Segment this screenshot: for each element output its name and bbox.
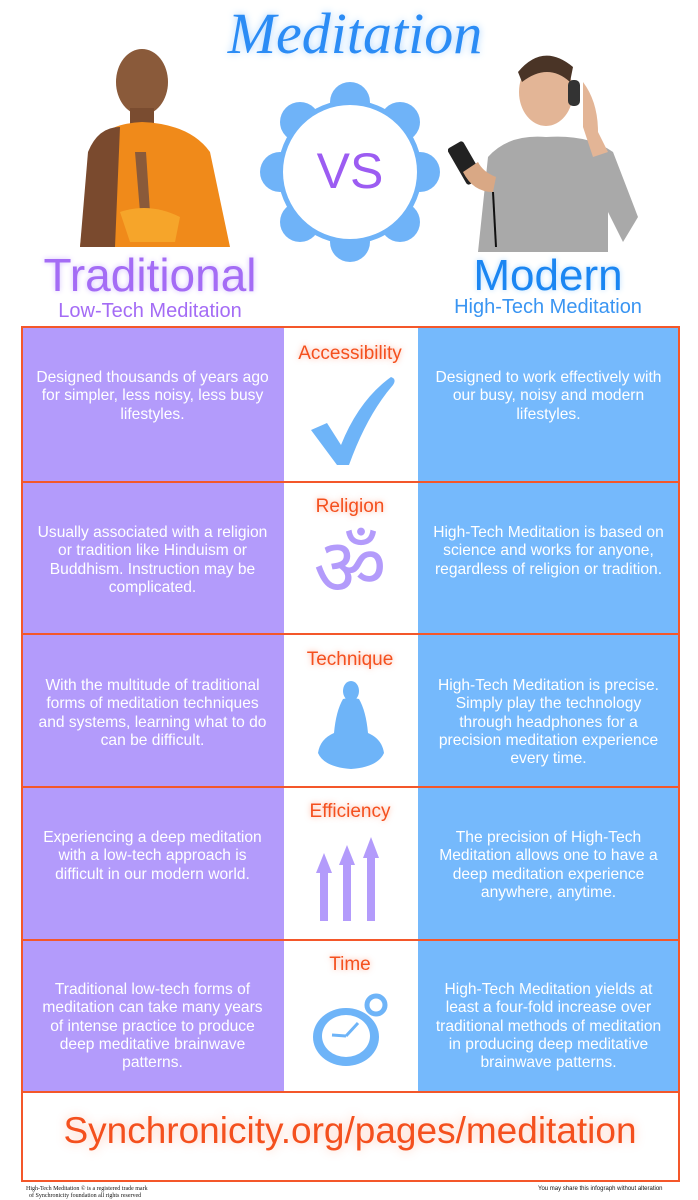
text: traditional religion: complicated. — [109, 579, 196, 596]
text: traditional accessibility: Designed thousands of years ago — [36, 369, 269, 386]
text: modern efficiency: The precision of High-Tech — [456, 829, 641, 846]
footnote: trademark: of Synchronicity foundation all rights reserved — [29, 1193, 141, 1199]
text: traditional technique: forms of meditation techniques — [46, 695, 259, 712]
text: traditional technique: can be difficult. — [101, 732, 204, 749]
heading: Traditional: Traditional — [43, 249, 257, 301]
text: traditional technique: With the multitude of traditional — [45, 677, 260, 694]
column backgrounds — [23, 328, 284, 1091]
label: Technique: Technique — [307, 649, 393, 670]
text: modern efficiency — [439, 829, 658, 901]
icon: checkmark — [311, 377, 395, 465]
title: Meditation — [228, 1, 482, 66]
text: traditional time: Traditional low-tech forms of — [55, 981, 250, 998]
subheading: Low-Tech Meditation: Low-Tech Meditation — [58, 300, 242, 322]
text: modern technique: through headphones for a — [459, 714, 638, 731]
text: modern religion: regardless of religion or tradition. — [435, 561, 662, 578]
label: Religion: Religion — [316, 496, 384, 517]
text: modern religion: High-Tech Meditation is based on — [433, 524, 664, 541]
text: traditional technique — [39, 677, 266, 749]
text: modern efficiency: deep meditation experience — [453, 866, 644, 883]
text: modern time — [436, 981, 661, 1071]
text: traditional religion: Buddhism. Instruction may be — [50, 561, 255, 578]
icon: stopwatch — [313, 994, 388, 1066]
text: modern technique — [438, 677, 659, 767]
text: modern accessibility: our busy, noisy and modern — [453, 387, 644, 404]
text: traditional religion: Usually associated with a religion — [38, 524, 267, 541]
text: traditional efficiency: difficult in our modern world. — [55, 866, 250, 883]
text: traditional time: patterns. — [122, 1054, 183, 1071]
label: Time: Time — [329, 954, 371, 975]
comparison table — [21, 326, 680, 1182]
footnote: trademark: High-Tech Meditation © is a registered trade mark — [26, 1186, 148, 1192]
text: modern time: least a four-fold increase over — [446, 999, 651, 1016]
footnote: trademark — [26, 1186, 148, 1199]
text: modern efficiency: Meditation allows one to have a — [439, 847, 658, 864]
text: traditional efficiency: Experiencing a deep meditation — [43, 829, 262, 846]
VS lotus badge: VS — [317, 143, 383, 199]
row: Efficiency — [43, 800, 658, 921]
text: traditional time: of intense practice to produce — [50, 1018, 255, 1035]
text: modern accessibility — [436, 369, 661, 423]
row: Accessibility — [36, 342, 661, 465]
label: Accessibility: Accessibility — [298, 343, 402, 364]
VS lotus badge — [260, 82, 440, 262]
icon: meditating figure — [318, 681, 384, 769]
text: modern time: traditional methods of meditation — [436, 1018, 661, 1035]
footnote: sharing: You may share this infograph without alteration — [538, 1186, 663, 1192]
text: modern accessibility: Designed to work effectively with — [436, 369, 661, 386]
photo: monk — [80, 49, 230, 247]
text: traditional religion — [38, 524, 267, 596]
text: modern accessibility: lifestyles. — [516, 406, 581, 423]
text: traditional efficiency: with a low-tech approach is — [58, 847, 247, 864]
text: modern efficiency: anywhere, anytime. — [481, 884, 616, 901]
text: traditional efficiency — [43, 829, 262, 883]
text: traditional religion: or tradition like Hinduism or — [58, 542, 247, 559]
text: traditional accessibility: for simpler, less noisy, less busy — [42, 387, 263, 404]
text: traditional time — [42, 981, 263, 1071]
text: traditional time: meditation can take many years — [42, 999, 263, 1016]
text: modern religion: science and works for anyone, — [443, 542, 654, 559]
heading: Modern — [454, 251, 642, 318]
text: modern time: in producing deep meditative — [449, 1036, 648, 1053]
text: traditional accessibility: lifestyles. — [120, 406, 185, 423]
text: traditional technique: and systems, learning what to do — [39, 714, 266, 731]
footer URL: Synchronicity.org/pages/meditation — [63, 1110, 637, 1151]
label: Efficiency: Efficiency — [310, 801, 390, 822]
text: modern technique: High-Tech Meditation is precise. — [438, 677, 659, 694]
text: traditional accessibility — [36, 369, 269, 423]
row: Time — [42, 953, 661, 1071]
subheading: High-Tech Meditation: High-Tech Meditation — [454, 296, 642, 318]
heading: Modern: Modern — [473, 251, 623, 300]
text: modern time: brainwave patterns. — [480, 1054, 617, 1071]
photo: modern man with headphones — [448, 56, 638, 252]
icon: three up arrows — [316, 837, 379, 921]
row: Technique — [39, 648, 659, 769]
text: modern technique: Simply play the technology — [456, 695, 641, 712]
text: modern time: High-Tech Meditation yields at — [444, 981, 653, 998]
text: modern religion — [433, 524, 664, 578]
text: modern technique: precision meditation experience — [439, 732, 658, 749]
text: traditional time: deep meditative brainwave — [60, 1036, 245, 1053]
icon: om: ॐ — [314, 521, 386, 614]
text: modern technique: every time. — [510, 750, 587, 767]
row: Religion — [38, 495, 664, 614]
